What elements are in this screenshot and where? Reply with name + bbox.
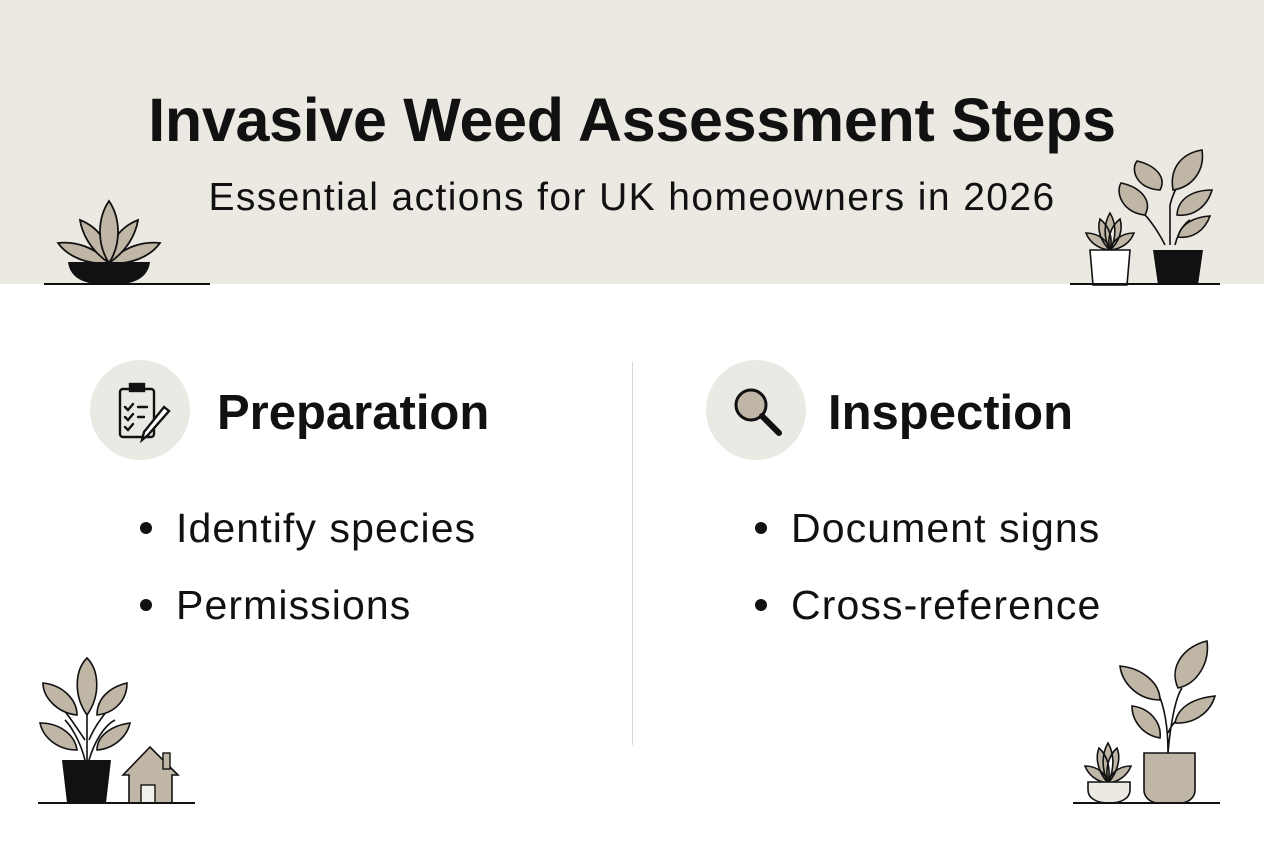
divider [632,362,633,745]
heading: Inspection: Inspection [828,386,1073,440]
panel: preparation [90,360,489,628]
bullet list: Permissions [176,582,411,628]
icon: two plants top-right [1070,149,1220,286]
icon: two plants bottom-right [1073,640,1220,804]
heading: Preparation: Preparation [217,386,489,440]
subtitle: Essential actions for UK homeowners in 2026 [208,176,1056,219]
bullet list [755,504,1101,628]
bullet list: Cross-reference [791,582,1101,628]
icon: clipboard [90,360,190,460]
bullet list: Document signs [791,504,1100,550]
bullet list [140,504,476,628]
icon: magnifier [706,360,806,460]
title: Invasive Weed Assessment Steps [148,86,1116,154]
icon: plant and house bottom-left [38,656,195,804]
panel: inspection [706,360,1101,628]
header band [0,0,1264,284]
bullet list: Identify species [176,504,476,550]
icon: succulent bowl top-left [44,200,210,285]
